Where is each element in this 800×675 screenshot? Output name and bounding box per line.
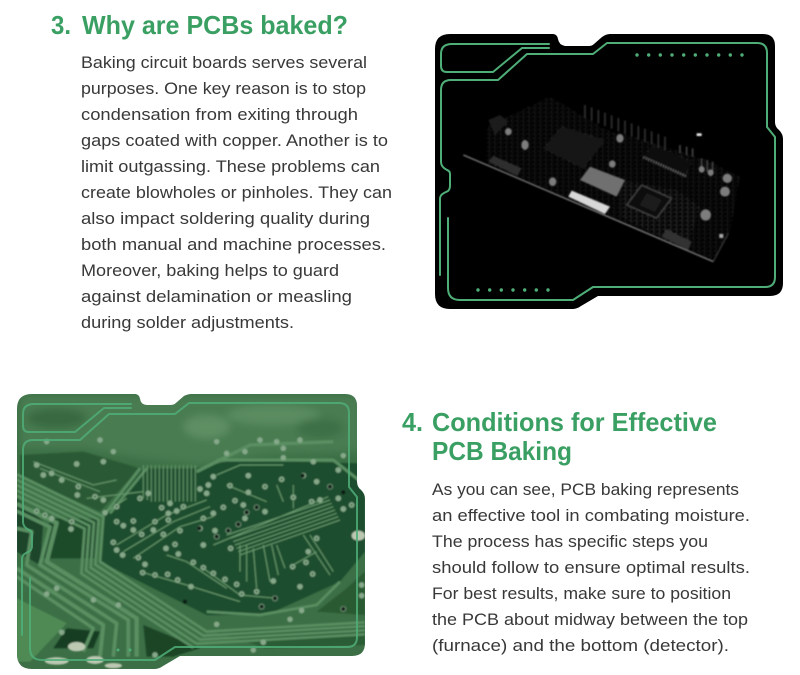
text block: conditions for effective baking bbox=[432, 481, 750, 655]
text block: conditions for effective baking: As you can see, PCB baking represents bbox=[432, 481, 739, 499]
text block: why PCBs are baked: both manual and machine processes. bbox=[81, 236, 386, 254]
bright reflections bbox=[45, 531, 365, 668]
heading: section 4: PCB Baking bbox=[432, 436, 572, 466]
text block: why PCBs are baked: gaps coated with copper. Another is to bbox=[81, 132, 388, 150]
solder pads bbox=[37, 440, 362, 655]
dots: top right row bbox=[637, 53, 742, 57]
text block: why PCBs are baked: Baking circuit boards serves several bbox=[81, 54, 367, 72]
text block: why PCBs are baked: also impact soldering quality during bbox=[81, 210, 370, 228]
text block: why PCBs are baked: create blowholes or pinholes. They can bbox=[81, 184, 392, 202]
text block: why PCBs are baked: during solder adjustments. bbox=[81, 314, 294, 332]
dark substrate bbox=[100, 460, 365, 615]
heading: section 3: Why are PCBs baked? bbox=[82, 10, 348, 40]
dots: bottom left row bbox=[478, 288, 548, 292]
trace bundles bbox=[17, 442, 365, 657]
text block: conditions for effective baking: For best results, make sure to position bbox=[432, 585, 731, 603]
heading: section 4 bbox=[402, 407, 717, 466]
circuit outline: green traces bbox=[22, 403, 357, 660]
image: dark circuit board bbox=[463, 97, 740, 262]
heading: section 4: 4. bbox=[402, 407, 423, 437]
panel: dark circuit board photo frame bbox=[435, 34, 783, 309]
text block: why PCBs are baked: purposes. One key reason is to stop bbox=[81, 80, 366, 98]
text block: why PCBs are baked bbox=[81, 54, 392, 332]
image: green circuit board bbox=[13, 392, 370, 675]
text block: conditions for effective baking: an effective tool in combating moisture. bbox=[432, 507, 750, 525]
fine traces bbox=[33, 462, 340, 602]
text block: why PCBs are baked: limit outgassing. These problems can bbox=[81, 158, 380, 176]
circuit outline: green traces bbox=[440, 43, 775, 300]
heading: section 3: 3. bbox=[51, 10, 71, 40]
text block: why PCBs are baked: Moreover, baking helps to guard bbox=[81, 262, 339, 280]
heading: section 4: Conditions for Effective bbox=[432, 407, 717, 437]
text block: conditions for effective baking: (furnace) and the bottom (detector). bbox=[432, 637, 729, 655]
dots: faint row bbox=[118, 648, 130, 652]
panel: green circuit board photo frame bbox=[13, 392, 370, 675]
text block: conditions for effective baking: the PCB about midway between the top bbox=[432, 611, 748, 629]
text block: conditions for effective baking: The process has specific steps you bbox=[432, 533, 708, 551]
text block: why PCBs are baked: condensation from exiting through bbox=[81, 106, 358, 124]
text block: why PCBs are baked: against delamination or measling bbox=[81, 288, 352, 306]
text block: conditions for effective baking: should follow to ensure optimal results. bbox=[432, 559, 750, 577]
